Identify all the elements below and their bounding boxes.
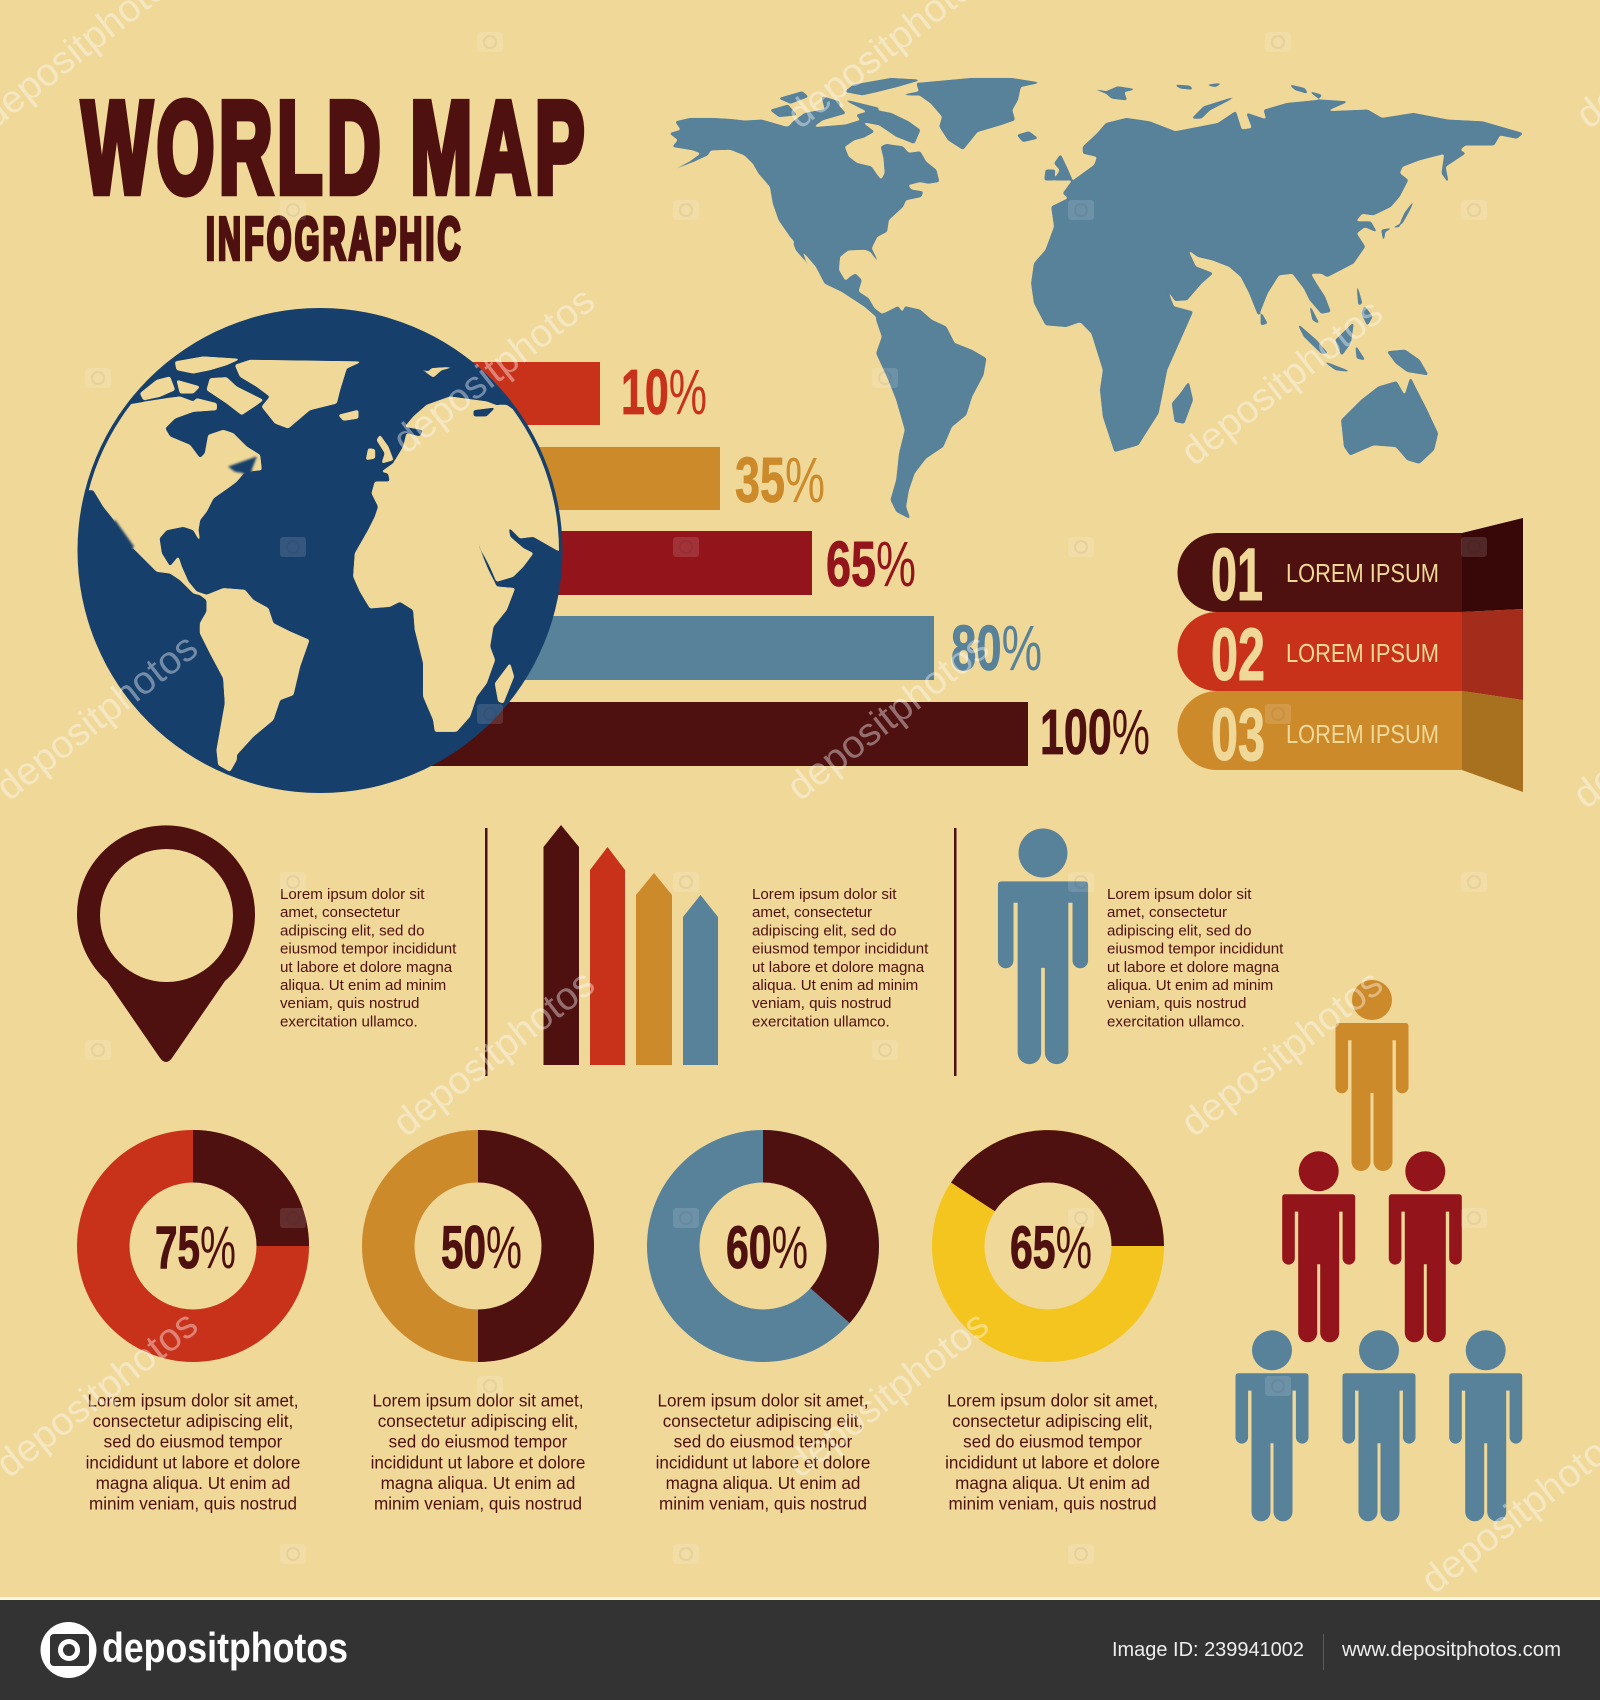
text block: arrows: exercitation ullamco. bbox=[752, 1013, 890, 1030]
globe: Greenland bbox=[235, 360, 362, 428]
map: Arctic islands bbox=[771, 78, 920, 143]
label 01: LOREM IPSUM bbox=[1286, 558, 1439, 588]
globe: Arctic islands bbox=[140, 357, 263, 415]
globe: Americas bbox=[80, 397, 309, 772]
text block: pin: amet, consectetur bbox=[280, 904, 400, 921]
text block: arrows: aliqua. Ut enim ad minim bbox=[752, 977, 918, 994]
logo text: depositphotos bbox=[102, 1624, 348, 1671]
text block: pin: ut labore et dolore magna bbox=[280, 959, 453, 976]
bar 35% bbox=[320, 447, 720, 510]
donut chart 50% bbox=[362, 1130, 594, 1362]
text block: donut 2: consectetur adipiscing elit, bbox=[378, 1412, 578, 1431]
text block: pin: eiusmod tempor incididunt bbox=[280, 941, 457, 958]
text block: person: veniam, quis nostrud bbox=[1107, 995, 1246, 1012]
globe: Madagascar bbox=[495, 663, 514, 703]
text block: donut 1: magna aliqua. Ut enim ad bbox=[96, 1474, 290, 1493]
ribbon fold 02 bbox=[1462, 609, 1523, 700]
ribbon fold 03 bbox=[1462, 691, 1523, 792]
map: North America bbox=[667, 118, 939, 317]
map: Greenland bbox=[903, 78, 1039, 149]
map: New Guinea bbox=[1388, 350, 1428, 375]
text block: arrows: adipiscing elit, sed do bbox=[752, 922, 896, 939]
text block: donut 2: incididunt ut labore et dolore bbox=[371, 1453, 585, 1472]
website: www.depositphotos.com bbox=[1341, 1638, 1561, 1661]
bar 80% bbox=[320, 616, 934, 680]
map: Australia bbox=[1342, 378, 1438, 463]
text block: arrows: eiusmod tempor incididunt bbox=[752, 941, 929, 958]
watermark overlay: depositphotos bbox=[1173, 962, 1391, 1145]
ribbon fold 01 bbox=[1462, 518, 1523, 612]
text block: donut 3: Lorem ipsum dolor sit amet, bbox=[658, 1392, 868, 1410]
donut chart 65%: 65% bbox=[1010, 1214, 1092, 1281]
footer divider bbox=[1323, 1634, 1324, 1670]
globe: Iceland and Svalbard bbox=[338, 367, 457, 421]
title: INFOGRAPHIC bbox=[206, 207, 464, 273]
text block: person: aliqua. Ut enim ad minim bbox=[1107, 977, 1273, 994]
map: Eurasia and Africa bbox=[1032, 100, 1522, 452]
person blue left bbox=[1236, 1330, 1308, 1521]
icon: map pin bbox=[77, 825, 255, 1062]
text block: donut 2: minim veniam, quis nostrud bbox=[374, 1494, 582, 1514]
text block: donut 3: sed do eiusmod tempor bbox=[674, 1433, 853, 1452]
bar 65% bbox=[320, 531, 812, 595]
globe: Europe and Africa bbox=[353, 397, 580, 732]
watermark overlay: depositphotos bbox=[385, 279, 603, 462]
ribbon item 01 bbox=[1178, 533, 1462, 612]
text block: pin: exercitation ullamco. bbox=[280, 1013, 418, 1030]
text block: person: ut labore et dolore magna bbox=[1107, 959, 1280, 976]
ribbon item 02 bbox=[1178, 612, 1462, 691]
text block: donut 4: sed do eiusmod tempor bbox=[963, 1433, 1142, 1452]
text block: person: Lorem ipsum dolor sit bbox=[1107, 886, 1252, 903]
ribbon legend bbox=[1178, 518, 1523, 792]
percent labels bbox=[621, 356, 1150, 768]
label 100%: 100% bbox=[1040, 696, 1150, 768]
bar 10% bbox=[320, 362, 600, 425]
label 10%: 10% bbox=[621, 356, 707, 428]
text block: pin: adipiscing elit, sed do bbox=[280, 922, 424, 939]
map: Europe and Asia islands bbox=[1017, 83, 1413, 423]
number 02: 02 bbox=[1211, 613, 1265, 696]
label 03: LOREM IPSUM bbox=[1286, 719, 1439, 749]
text block: donut 2: sed do eiusmod tempor bbox=[389, 1433, 568, 1452]
watermark overlay: depositphotos bbox=[779, 1303, 997, 1486]
text block: pin: aliqua. Ut enim ad minim bbox=[280, 977, 446, 994]
image id: Image ID: 239941002 bbox=[1112, 1638, 1304, 1661]
arrow 4 bbox=[683, 895, 718, 1065]
map: Baja California bbox=[794, 243, 810, 268]
icon: camera logo bbox=[40, 1622, 96, 1678]
text block: person: amet, consectetur bbox=[1107, 904, 1227, 921]
text block: person: adipiscing elit, sed do bbox=[1107, 922, 1251, 939]
text block: donut 1: sed do eiusmod tempor bbox=[104, 1433, 283, 1452]
person orange top bbox=[1336, 980, 1408, 1171]
globe: British Isles bbox=[366, 435, 393, 463]
text block: donut 4: consectetur adipiscing elit, bbox=[952, 1412, 1153, 1431]
label 35%: 35% bbox=[735, 444, 825, 516]
globe: Gulf of St Lawrence and Baja channel bbox=[113, 457, 257, 551]
text block: arrows: amet, consectetur bbox=[752, 904, 872, 921]
text block: donut 4: Lorem ipsum dolor sit amet, bbox=[947, 1392, 1158, 1410]
text block: donut 2: magna aliqua. Ut enim ad bbox=[381, 1474, 575, 1493]
text block: donut 3: consectetur adipiscing elit, bbox=[663, 1412, 863, 1431]
icon: person bbox=[998, 829, 1088, 1064]
arrow 3 bbox=[636, 873, 672, 1065]
text block: pin: veniam, quis nostrud bbox=[280, 995, 419, 1012]
text block: donut 3: minim veniam, quis nostrud bbox=[659, 1494, 867, 1514]
number 03: 03 bbox=[1211, 693, 1265, 776]
arrow 1 bbox=[544, 825, 579, 1065]
text block: pin: Lorem ipsum dolor sit bbox=[280, 886, 425, 903]
text block: donut 1: Lorem ipsum dolor sit amet, bbox=[88, 1392, 298, 1410]
text block: donut 3: incididunt ut labore et dolore bbox=[656, 1453, 870, 1472]
donut chart 50%: 50% bbox=[441, 1214, 522, 1281]
donut chart 65% bbox=[932, 1130, 1164, 1362]
text block: donut 4: incididunt ut labore et dolore bbox=[945, 1453, 1160, 1472]
arrow 2 bbox=[590, 847, 625, 1065]
label 02: LOREM IPSUM bbox=[1286, 638, 1439, 668]
text block: arrows: Lorem ipsum dolor sit bbox=[752, 886, 897, 903]
world map bbox=[667, 78, 1522, 518]
map: South America bbox=[877, 307, 986, 518]
footer bar bbox=[0, 1597, 1600, 1700]
text block: person: exercitation ullamco. bbox=[1107, 1013, 1245, 1030]
people pyramid bbox=[1236, 980, 1522, 1521]
watermark overlay: depositphotos bbox=[1173, 291, 1391, 474]
ribbon item 03 bbox=[1178, 691, 1462, 770]
label 65%: 65% bbox=[826, 528, 916, 600]
donut chart 60%: 60% bbox=[726, 1214, 808, 1281]
divider line right bbox=[954, 828, 956, 1076]
bar 100% bbox=[320, 702, 1028, 766]
text block: donut 4: minim veniam, quis nostrud bbox=[948, 1494, 1157, 1514]
text block: arrows: ut labore et dolore magna bbox=[752, 959, 925, 976]
globe bbox=[78, 308, 580, 793]
text block: donut 2: Lorem ipsum dolor sit amet, bbox=[373, 1392, 583, 1410]
text block: donut 1: minim veniam, quis nostrud bbox=[89, 1494, 297, 1514]
bar chart behind globe bbox=[320, 362, 1028, 766]
divider line left bbox=[485, 828, 488, 1076]
person crimson left bbox=[1282, 1151, 1355, 1342]
donut chart 75%: 75% bbox=[155, 1214, 236, 1281]
text block: donut 1: consectetur adipiscing elit, bbox=[93, 1412, 293, 1431]
donut chart 60% bbox=[647, 1130, 879, 1362]
title: WORLD MAP bbox=[82, 76, 589, 221]
chart: arrow bars bbox=[544, 825, 718, 1065]
watermark overlay: depositphotos bbox=[779, 626, 997, 809]
text block: donut 3: magna aliqua. Ut enim ad bbox=[666, 1474, 860, 1493]
person crimson right bbox=[1389, 1151, 1462, 1342]
text block: donut 1: incididunt ut labore et dolore bbox=[86, 1453, 300, 1472]
donut chart 75% bbox=[77, 1130, 309, 1362]
text block: person: eiusmod tempor incididunt bbox=[1107, 941, 1284, 958]
person blue right bbox=[1449, 1330, 1522, 1521]
number 01: 01 bbox=[1211, 533, 1263, 616]
label 80%: 80% bbox=[951, 612, 1042, 684]
text block: donut 4: magna aliqua. Ut enim ad bbox=[955, 1474, 1150, 1493]
text block: arrows: veniam, quis nostrud bbox=[752, 995, 891, 1012]
person blue middle bbox=[1342, 1330, 1416, 1521]
watermark overlay: depositphotos bbox=[385, 962, 603, 1145]
